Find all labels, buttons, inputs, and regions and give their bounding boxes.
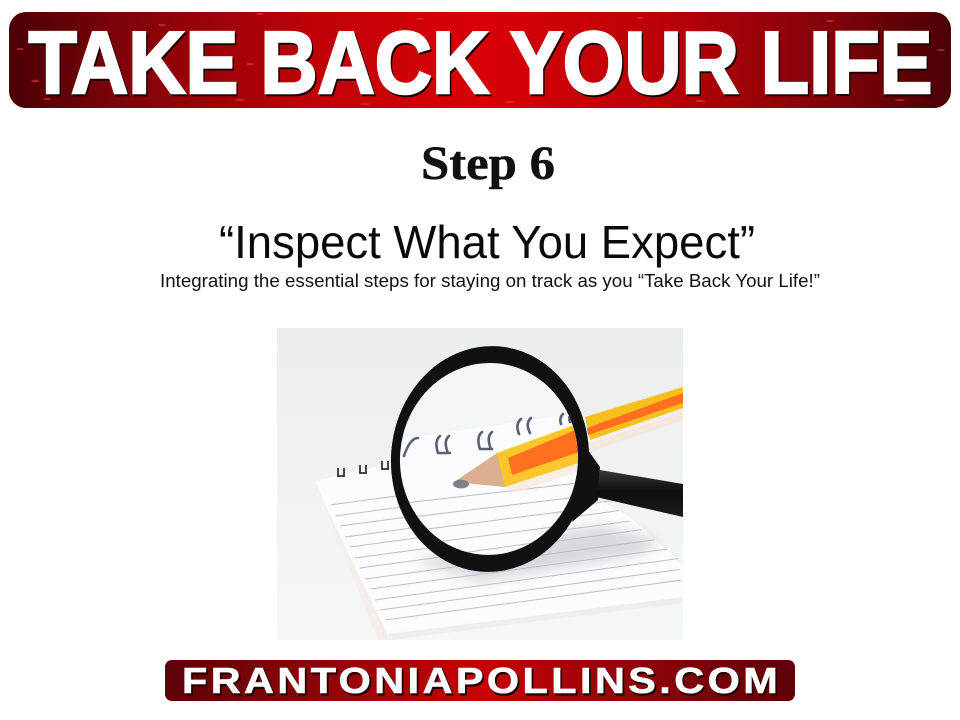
- lens ring: [390, 346, 589, 572]
- footer banner: [165, 660, 795, 703]
- notepad: [316, 461, 683, 640]
- photo: magnifying glass over notepad and pencil: [277, 328, 690, 640]
- magnifier handle: [572, 450, 683, 522]
- header banner: [9, 12, 951, 114]
- subtitle: Integrating the essential steps for staying on track as you “Take Back Your Life!”: [160, 271, 820, 291]
- footer text shadow: FRANTONIAPOLLINS.COM: [184, 663, 779, 703]
- main quote heading: “Inspect What You Expect”: [219, 216, 755, 268]
- pencil tip: [454, 453, 505, 487]
- footer text: FRANTONIAPOLLINS.COM: [182, 661, 778, 701]
- pencil behind lens: [585, 387, 683, 452]
- step heading: Step 6: [421, 137, 555, 190]
- magnified lens view: [400, 412, 578, 555]
